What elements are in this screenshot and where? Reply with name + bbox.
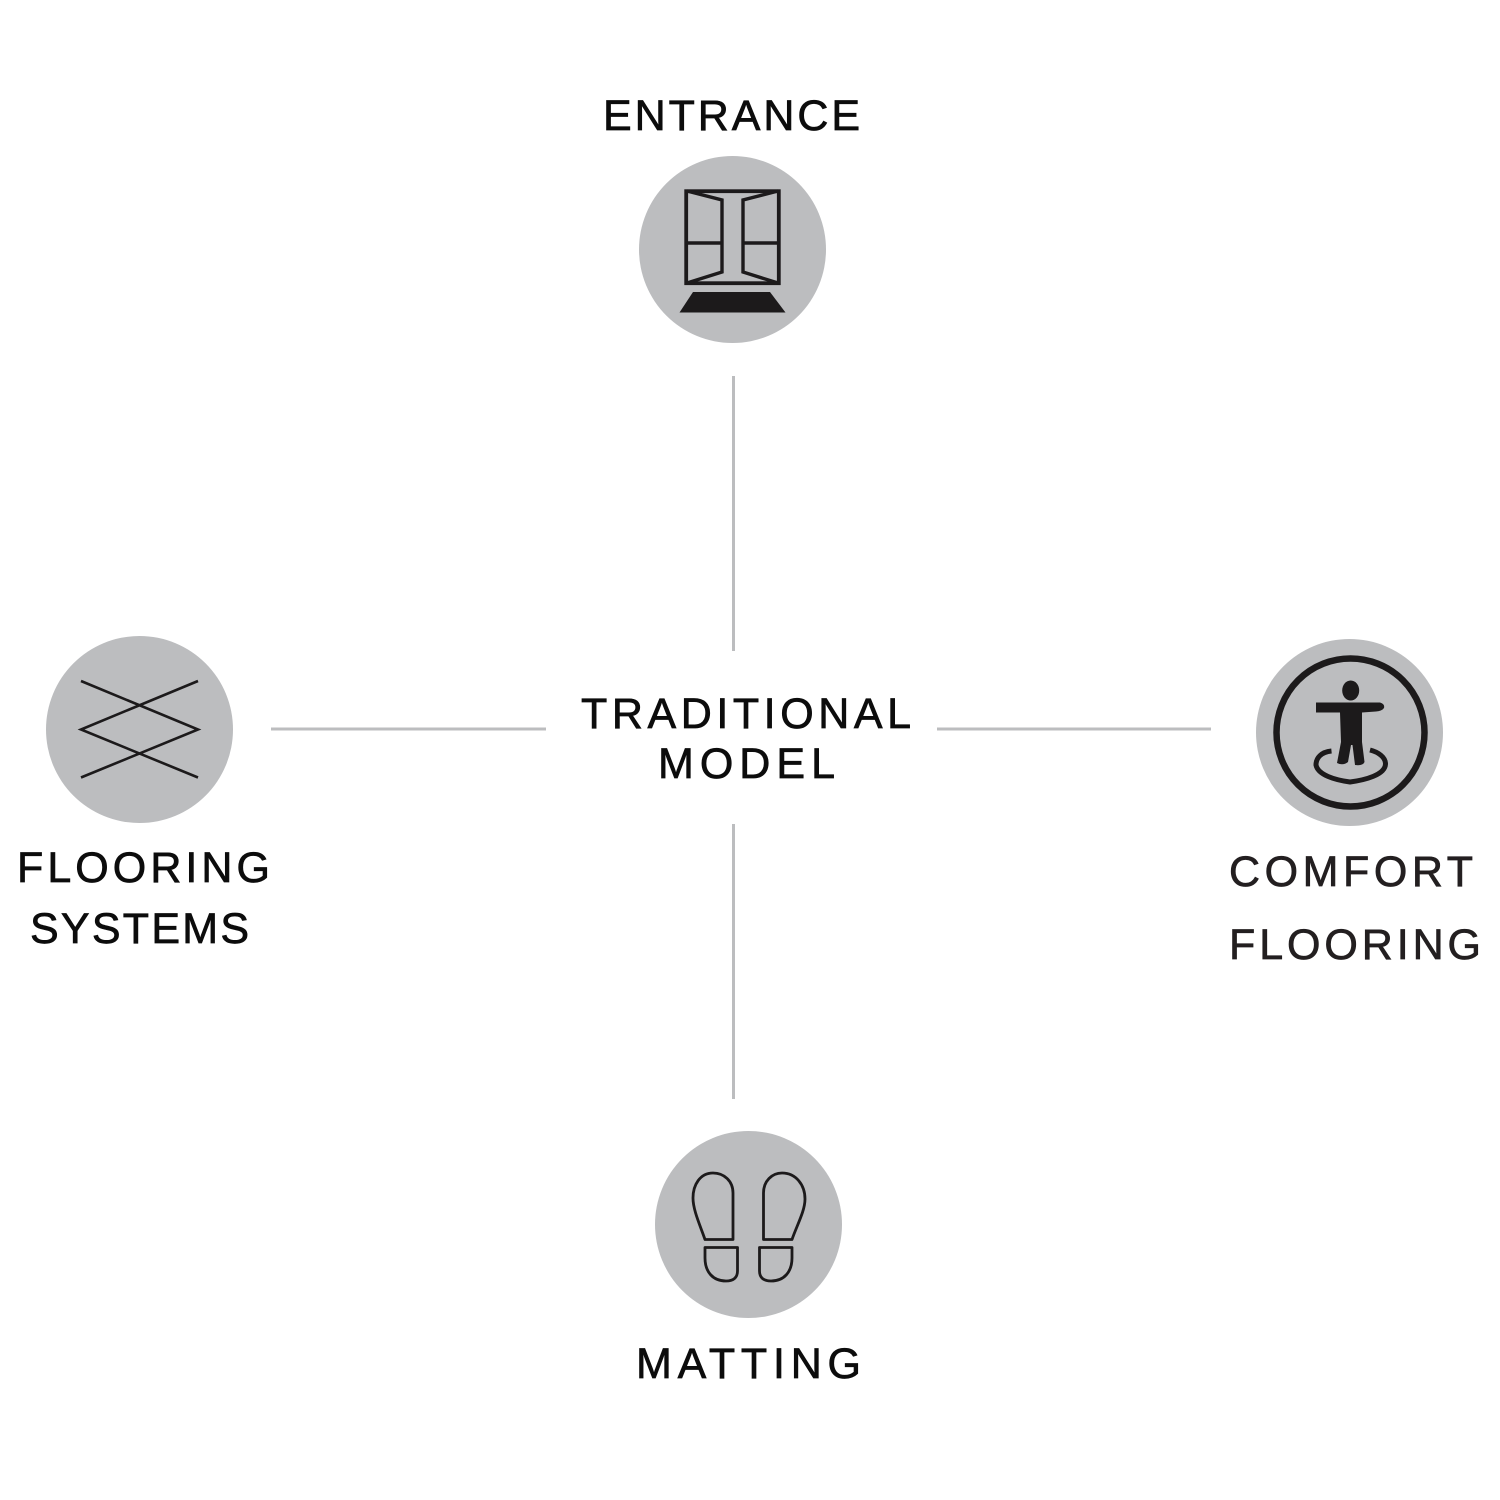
- heading: flooring systems: FLOORING: [17, 844, 274, 892]
- connector: down to matting: [732, 824, 735, 1099]
- heading: flooring systems: [17, 844, 274, 953]
- icon: matting footprints: [655, 1131, 842, 1318]
- heading: matting: MATTING: [636, 1340, 865, 1388]
- center label: MODEL: [658, 740, 839, 788]
- connector: left to flooring systems: [271, 728, 546, 730]
- center label: TRADITIONAL: [581, 690, 915, 738]
- center label: [581, 690, 915, 788]
- heading: comfort flooring: FLOORING: [1229, 921, 1485, 969]
- connector: right to comfort flooring: [937, 728, 1211, 730]
- heading: entrance: ENTRANCE: [603, 92, 864, 140]
- icon: comfort flooring person: [1256, 639, 1443, 826]
- heading: flooring systems: SYSTEMS: [30, 905, 253, 953]
- icon: entrance doors and mat: [639, 156, 826, 343]
- connector: up to entrance: [732, 376, 735, 651]
- heading: comfort flooring: COMFORT: [1229, 848, 1477, 896]
- heading: comfort flooring: [1229, 848, 1485, 969]
- icon: flooring crossing lines: [46, 636, 233, 823]
